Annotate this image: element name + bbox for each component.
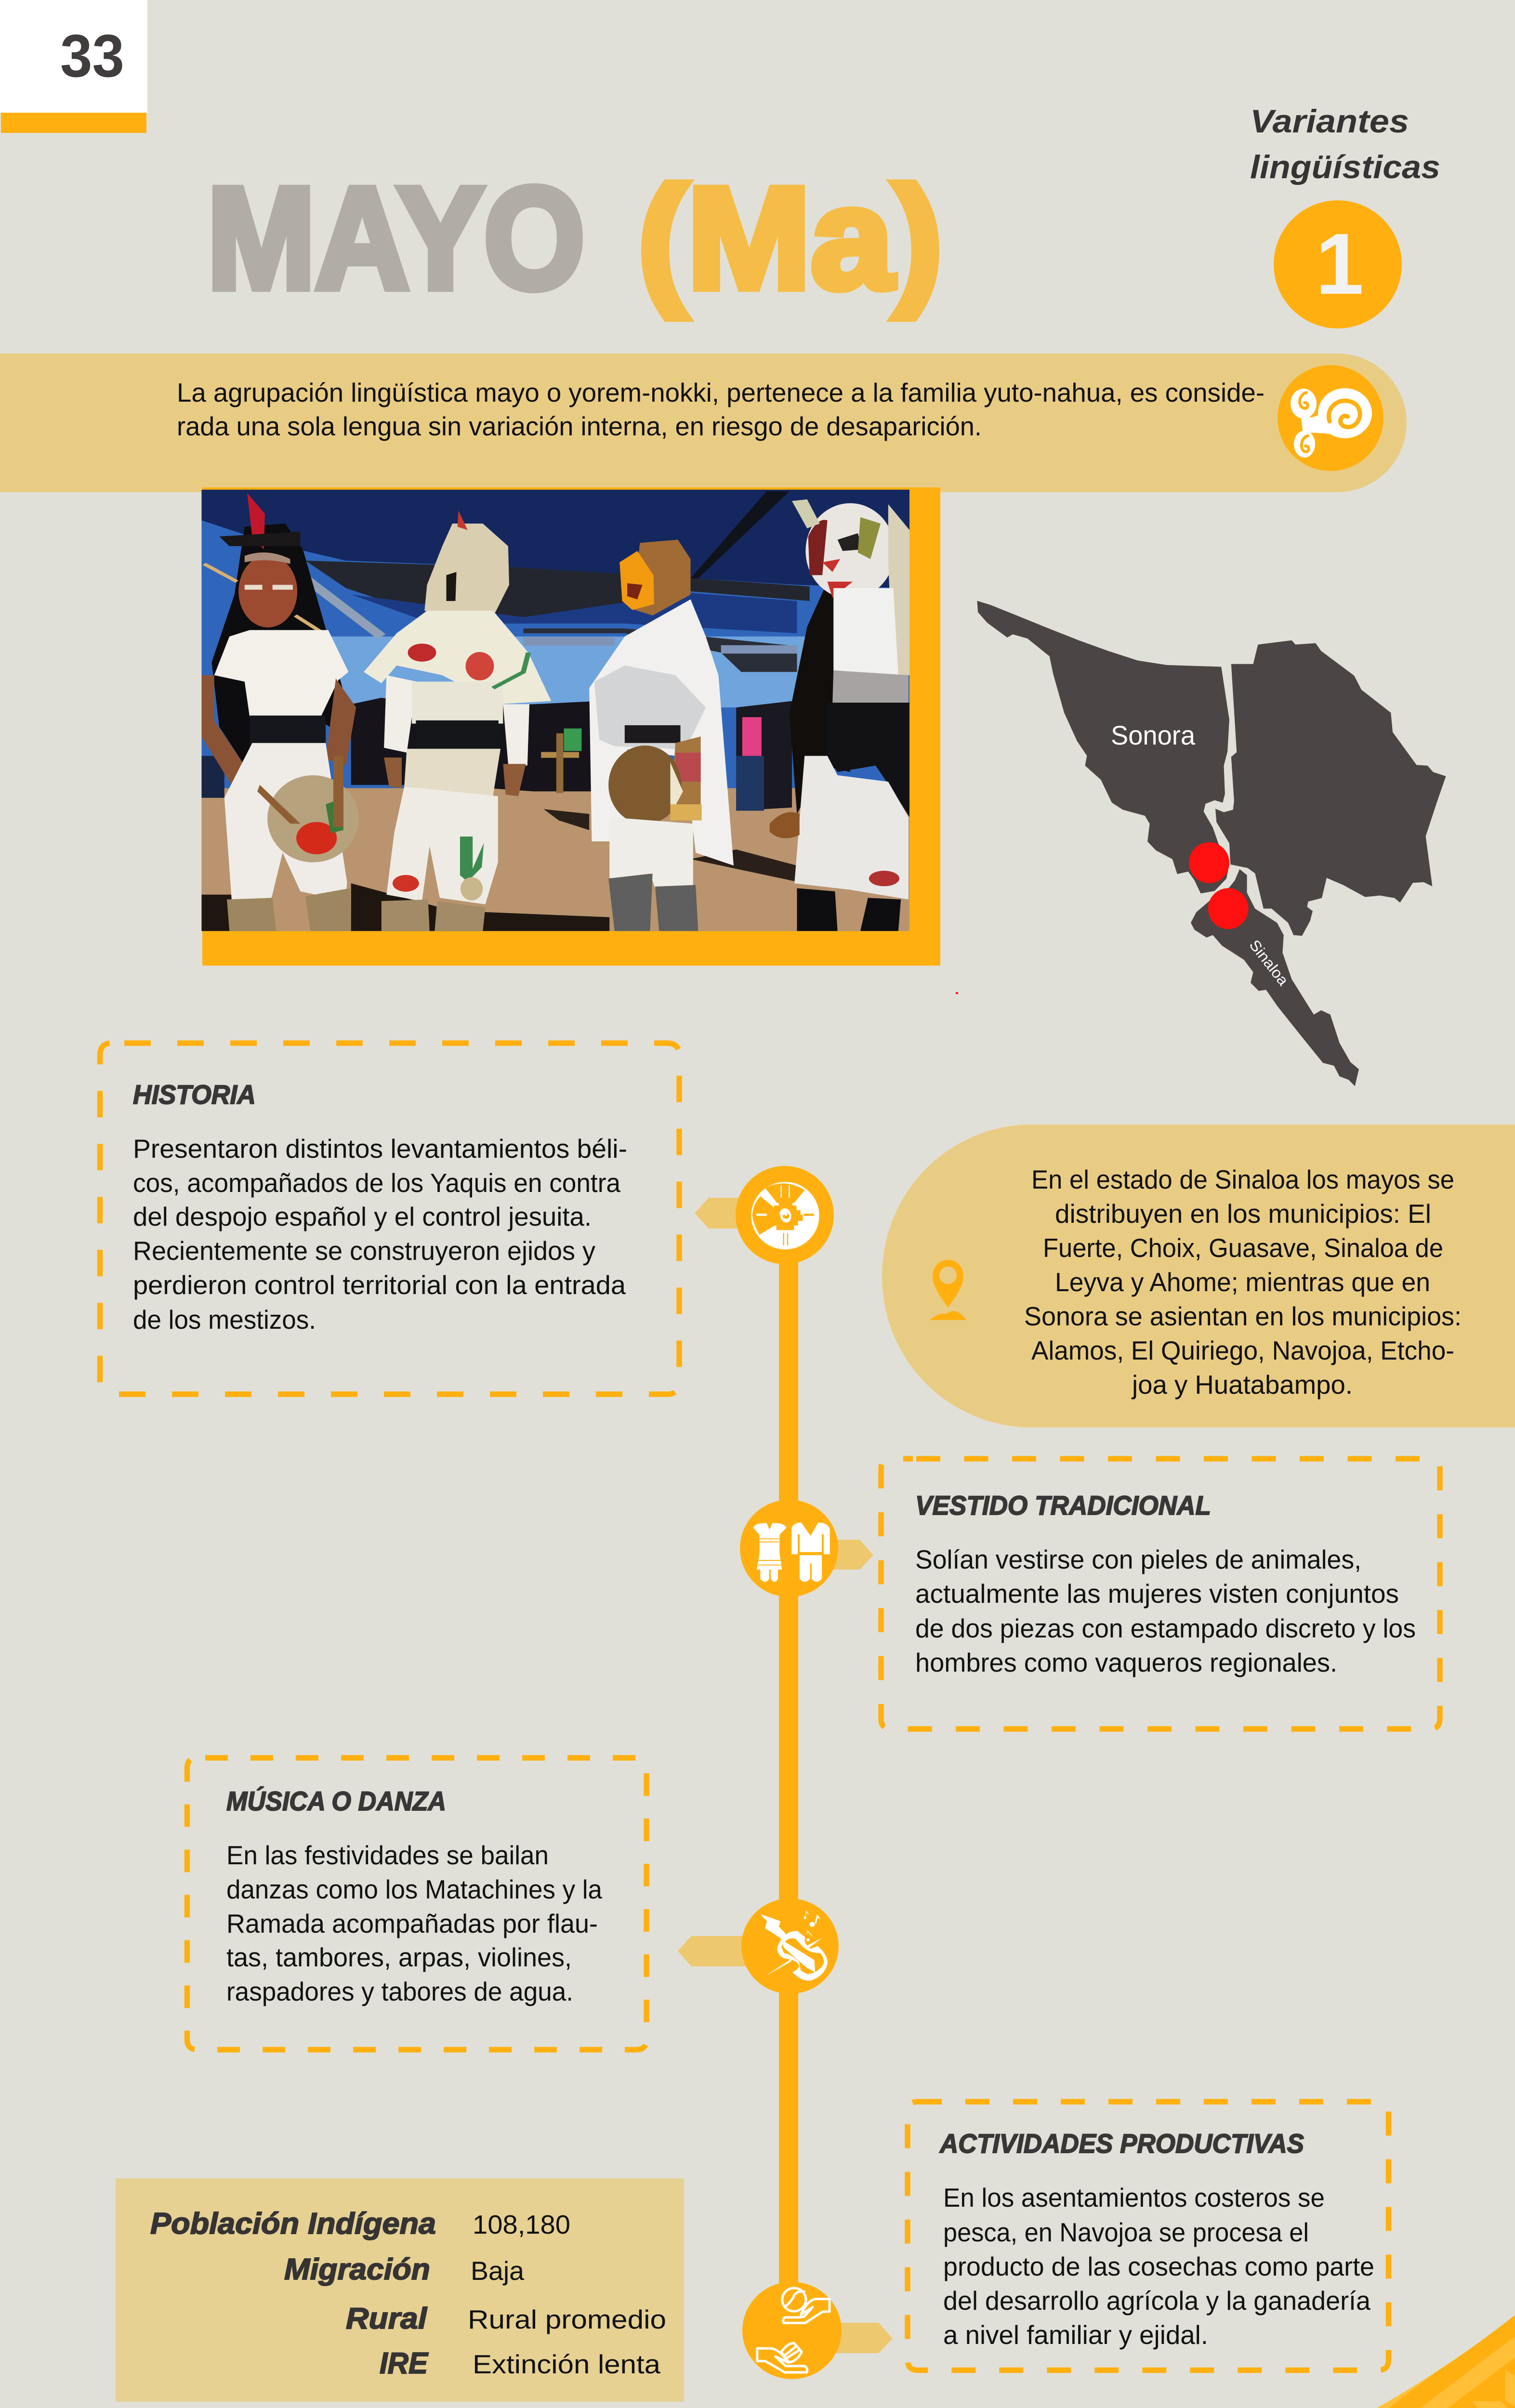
panel: vestido tradicional: actualmente las mujeres visten conjuntos xyxy=(915,1579,1399,1609)
panel: location: Alamos, El Quiriego, Navojoa, Etcho- xyxy=(1031,1335,1454,1365)
panel: música o danza: En las festividades se bailan xyxy=(226,1840,549,1870)
panel: population stats: Migración xyxy=(284,2253,430,2286)
panel: location: joa y Huatabampo. xyxy=(1131,1370,1353,1400)
panel: population stats: IRE xyxy=(380,2347,429,2380)
panel: vestido tradicional: de dos piezas con estampado discreto y los xyxy=(915,1613,1416,1643)
panel: actividades productivas xyxy=(908,2102,1388,2370)
panel: actividades productivas: producto de las cosechas como parte xyxy=(943,2251,1374,2281)
arrow: historia xyxy=(695,1198,751,1229)
panel: location: Leyva y Ahome; mientras que en xyxy=(1055,1267,1430,1297)
panel: population stats xyxy=(116,2178,684,2402)
panel: population stats: Extinción lenta xyxy=(473,2349,660,2379)
panel: historia: Recientemente se construyeron ejidos y xyxy=(133,1236,595,1266)
panel: vestido tradicional xyxy=(881,1459,1440,1729)
linguistic variants counter: Variantes xyxy=(1250,103,1409,140)
panel: historia: HISTORIA xyxy=(133,1079,256,1110)
icon: location pin xyxy=(930,1260,966,1320)
panel: música o danza: MÚSICA O DANZA xyxy=(226,1786,446,1816)
panel: location: En el estado de Sinaloa los mayos se xyxy=(1031,1165,1454,1194)
panel: historia: del despojo español y el control jesuita. xyxy=(133,1202,592,1231)
title xyxy=(207,157,943,320)
title: MAYO xyxy=(207,157,585,319)
map: Sonora region xyxy=(977,601,1229,893)
panel: population stats: Población Indígena xyxy=(150,2207,436,2240)
panel: location: Fuerte, Choix, Guasave, Sinaloa de xyxy=(1043,1233,1443,1263)
panel: actividades productivas: a nivel familiar y ejidal. xyxy=(943,2320,1208,2350)
panel: actividades productivas: En los asentamientos costeros se xyxy=(943,2183,1325,2212)
icon: swirl xyxy=(1278,365,1383,471)
page number tab xyxy=(0,0,147,133)
panel: música o danza xyxy=(187,1758,646,2050)
panel: location xyxy=(882,1125,1515,1427)
ground xyxy=(201,788,909,931)
panel: música o danza: Ramada acompañadas por flau- xyxy=(226,1909,598,1938)
panel: historia: de los mestizos. xyxy=(133,1305,316,1335)
arrow: vestido xyxy=(819,1540,873,1570)
panel: historia xyxy=(100,1043,679,1394)
panel: introduction band xyxy=(0,353,1407,492)
panel: introduction band: rada una sola lengua sin variación interna, en riesgo de desaparición. xyxy=(177,411,982,441)
arrow: actividades xyxy=(819,2323,893,2353)
figure 3 xyxy=(632,540,691,615)
footer: woven pattern wave xyxy=(3,2315,1515,2408)
panel: música o danza: raspadores y tabores de agua. xyxy=(226,1976,573,2006)
figure 4 xyxy=(790,582,850,814)
panel: population stats: Rural promedio xyxy=(468,2304,666,2334)
icon: hands with seeds xyxy=(742,2282,842,2379)
panel: música o danza: tas, tambores, arpas, violines, xyxy=(226,1942,572,1972)
panel: population stats: Baja xyxy=(471,2256,524,2286)
photo: masked dancers xyxy=(201,487,940,966)
panel: location: Sonora se asientan en los municipios: xyxy=(1024,1301,1462,1331)
panel: population stats: Rural xyxy=(346,2302,428,2335)
panel: historia: perdieron control territorial con la entrada xyxy=(133,1270,626,1300)
page number tab: 33 xyxy=(60,23,124,90)
map: Sinaloa region xyxy=(1191,869,1359,1086)
map marker: Sonora xyxy=(1189,842,1229,883)
icon: violin xyxy=(741,1898,839,1994)
panel: vestido tradicional: hombres como vaqueros regionales. xyxy=(915,1648,1337,1677)
map xyxy=(977,601,1446,1086)
title: (Ma) xyxy=(638,157,943,320)
figure 1 xyxy=(211,523,343,766)
linguistic variants counter: lingüísticas xyxy=(1250,149,1440,185)
linguistic variants counter: 1 xyxy=(1316,216,1364,313)
map label: Sinaloa: Sinaloa xyxy=(1246,937,1292,989)
panel: historia: cos, acompañados de los Yaquis en contra xyxy=(133,1168,620,1198)
icon: hunab ku xyxy=(736,1166,834,1264)
panel: actividades productivas: del desarrollo agrícola y la ganadería xyxy=(943,2286,1370,2316)
linguistic variants counter xyxy=(1250,103,1440,328)
timeline xyxy=(678,1166,893,2379)
panel: historia: Presentaron distintos levantamientos béli- xyxy=(133,1134,627,1164)
panel: location: distribuyen en los municipios: El xyxy=(1055,1199,1431,1229)
panel: introduction band: La agrupación lingüística mayo o yorem-nokki, pertenece a la familia yuto-nahua, es conside- xyxy=(177,378,1265,407)
panel: vestido tradicional: VESTIDO TRADICIONAL xyxy=(915,1490,1211,1520)
crowd xyxy=(351,697,591,792)
map marker: Sinaloa xyxy=(1208,888,1249,929)
arrow: musica xyxy=(678,1936,751,1966)
panel: música o danza: danzas como los Matachines y la xyxy=(226,1874,602,1904)
map label: Sonora: Sonora xyxy=(1111,720,1196,750)
map: eastern region xyxy=(1215,641,1446,936)
panel: actividades productivas: ACTIVIDADES PRODUCTIVAS xyxy=(939,2128,1304,2159)
panel: population stats: 108,180 xyxy=(473,2210,570,2239)
figure 2 xyxy=(424,523,509,617)
panel: actividades productivas: pesca, en Navojoa se procesa el xyxy=(943,2217,1309,2247)
panel: vestido tradicional: Solían vestirse con pieles de animales, xyxy=(915,1544,1361,1574)
icon: traditional clothing xyxy=(740,1500,838,1597)
